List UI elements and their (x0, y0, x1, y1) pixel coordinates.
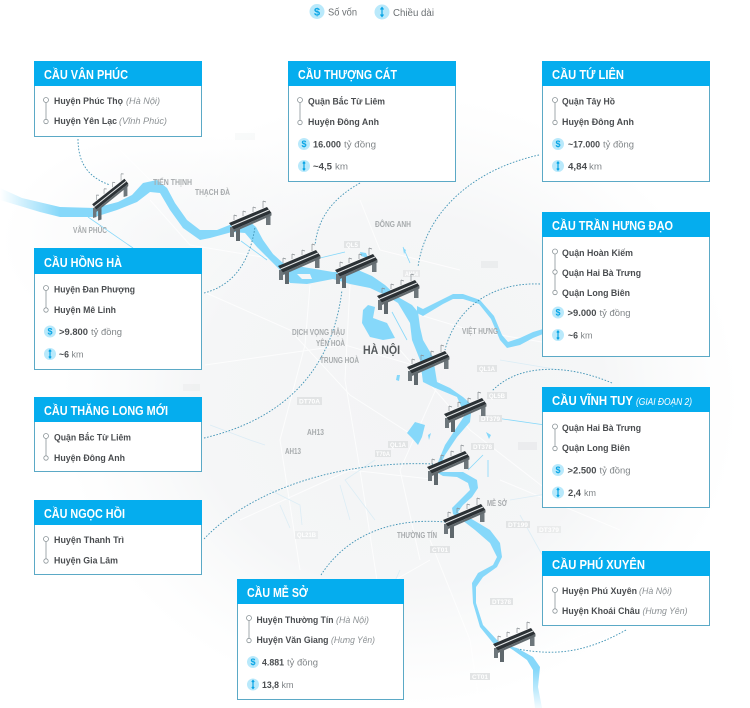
panel: Cầu Mễ Sở: Huyện Văn Giang (256, 635, 329, 646)
panel: Cầu Phú Xuyên: (Hà Nội) (639, 586, 672, 597)
panel: Cầu Mễ Sở: (Hưng Yên) (331, 635, 375, 646)
panel: Cầu Thượng Cát: Quận Bắc Từ Liêm (308, 96, 385, 108)
panel: Cầu Vĩnh Tuy (giai đoạn 2): tỷ đồng (600, 466, 630, 476)
road tags: DT379 (481, 416, 500, 423)
map labels: DỊCH VỌNG HẬU (292, 328, 345, 337)
road tags: DT70A (299, 398, 320, 406)
map labels: AH13 (307, 428, 324, 437)
panel: Cầu Văn Phúc: CẦU VÂN PHÚC (44, 67, 129, 82)
panel: Cầu Tứ Liên: Quận Tây Hồ (562, 96, 615, 108)
road tags: DT199 (508, 522, 528, 529)
road tags: QL5 (346, 242, 358, 249)
panel: Cầu Thượng Cát: $ (301, 139, 307, 149)
panel: Cầu Phú Xuyên: Huyện Khoái Châu (562, 606, 640, 617)
panel: Cầu Mễ Sở: Huyện Thường Tín (256, 615, 334, 626)
panel: Cầu Hồng Hà: tỷ đồng (91, 327, 122, 338)
panel: Cầu Mễ Sở: $ (250, 657, 256, 667)
legend: $ (314, 6, 320, 18)
panel: Cầu Thăng Long Mới: Quận Bắc Từ Liêm (54, 432, 131, 444)
panel: Cầu Mễ Sở: 4.881 (262, 658, 285, 668)
panel: Cầu Văn Phúc: (Hà Nội) (126, 96, 160, 107)
east branch of the river (417, 294, 543, 348)
road tags: AH14 (405, 271, 418, 278)
map labels: ĐÔNG ANH (375, 220, 411, 229)
panel: Cầu Phú Xuyên: Huyện Phú Xuyên (562, 586, 637, 597)
road tags: DT378 (492, 599, 511, 606)
map labels: YÊN HOÀ (316, 339, 345, 348)
panel: Cầu Hồng Hà: $ (47, 327, 53, 337)
panel: Cầu Hồng Hà: ~6 (59, 350, 69, 360)
panel: Cầu Vĩnh Tuy (giai đoạn 2): $ (555, 465, 561, 475)
map labels: VÂN PHÚC (73, 226, 107, 235)
road tags: DT378 (473, 444, 492, 451)
panel: Cầu Hồng Hà: Huyện Mê Linh (54, 305, 116, 316)
road tags (183, 133, 561, 681)
legend: Chiều dài (393, 7, 434, 19)
panel: Cầu Phú Xuyên: CẦU PHÚ XUYÊN (552, 557, 645, 572)
icon: bridge Thượng Cát (278, 244, 320, 284)
map labels: AH13 (285, 447, 301, 456)
panel: Cầu Trần Hưng Đạo: km (580, 330, 593, 342)
road tags: CT01 (432, 547, 448, 554)
panel: Cầu Tứ Liên (542, 61, 710, 182)
road tags: QL21B (297, 532, 316, 539)
panel: Cầu Mễ Sở: 13,8 (262, 680, 279, 691)
icon: bridge Mễ Sở (443, 498, 486, 538)
panel: Cầu Tứ Liên: ~17.000 (568, 140, 600, 150)
map labels: TIẾN THỊNH (153, 177, 192, 187)
road tags: T70A (376, 451, 390, 458)
panel: Cầu Trần Hưng Đạo: >9.000 (568, 308, 596, 319)
panel: Cầu Trần Hưng Đạo: $ (555, 308, 561, 318)
icon: bridge Tứ Liên (377, 274, 420, 314)
panel: Cầu Vĩnh Tuy (giai đoạn 2): >2.500 (568, 466, 596, 476)
panel: Cầu Hồng Hà (34, 248, 202, 370)
map labels: THẠCH ĐÀ (195, 188, 230, 197)
panel: Cầu Tứ Liên: tỷ đồng (603, 140, 634, 150)
panel: Cầu Văn Phúc: (Vĩnh Phúc) (119, 116, 167, 127)
panel: Cầu Văn Phúc: Huyện Phúc Thọ (54, 96, 123, 107)
panel: Cầu Mễ Sở: CẦU MỄ SỞ (247, 585, 309, 600)
legend (310, 4, 434, 20)
West Lake (362, 305, 395, 340)
river: Sông Hồng (0, 180, 545, 708)
panel: Cầu Thượng Cát: 16.000 (313, 140, 341, 150)
icon: bridge Phú Xuyên (493, 622, 536, 662)
panel: Cầu Thượng Cát: ~4,5 (313, 162, 333, 172)
island (297, 274, 312, 279)
panel: Cầu Trần Hưng Đạo (542, 212, 710, 356)
panel: Cầu Tứ Liên: $ (555, 139, 561, 149)
panel: Cầu Vĩnh Tuy (giai đoạn 2): Quận Long Biên (562, 443, 630, 454)
panel: Cầu Tứ Liên: Huyện Đông Anh (562, 117, 634, 128)
panel: Cầu Ngọc Hồi: Huyện Thanh Trì (54, 535, 124, 546)
icon: bridge Ngọc Hồi (427, 445, 470, 485)
map labels: THƯỜNG TÍN (397, 531, 437, 540)
panel: Cầu Ngọc Hồi (34, 500, 202, 574)
panel: Cầu Thăng Long Mới: Huyện Đông Anh (54, 453, 125, 464)
panel: Cầu Trần Hưng Đạo: Quận Hai Bà Trưng (562, 268, 641, 279)
panel: Cầu Mễ Sở: (Hà Nội) (336, 615, 369, 626)
panel: Cầu Trần Hưng Đạo: tỷ đồng (600, 308, 630, 319)
panel: Cầu Phú Xuyên (542, 551, 710, 626)
panel: Cầu Thượng Cát: Huyện Đông Anh (308, 117, 379, 128)
icon: bridge Hồng Hà (229, 201, 272, 241)
icon: bridge Vĩnh Tuy (444, 392, 486, 432)
panel: Cầu Ngọc Hồi: Huyện Gia Lâm (54, 556, 118, 566)
bridges (92, 172, 536, 662)
panel: Cầu Thăng Long Mới (34, 397, 202, 472)
panel: Cầu Hồng Hà: >9.800 (59, 327, 88, 338)
panel: Cầu Vĩnh Tuy (giai đoạn 2): CẦU VĨNH TUY (552, 393, 633, 408)
road tags: QL1A (390, 442, 406, 449)
panel: Cầu Thượng Cát: CẦU THƯỢNG CÁT (298, 67, 397, 82)
road tags: CT01 (472, 674, 488, 681)
panel: Cầu Tứ Liên: CẦU TỨ LIÊN (552, 67, 624, 82)
dotted connectors (78, 139, 626, 652)
map labels: VIỆT HƯNG (462, 327, 498, 336)
panel: Cầu Văn Phúc: Huyện Yên Lạc (54, 116, 117, 127)
small lakes (360, 248, 491, 445)
icon: bridge Trần Hưng Đạo (407, 345, 450, 385)
panel: Cầu Trần Hưng Đạo: ~6 (568, 330, 578, 342)
road tags: QL1A (479, 366, 495, 373)
panel: Cầu Hồng Hà: CẦU HỒNG HÀ (44, 255, 123, 270)
map labels: MỄ SỞ (487, 499, 507, 508)
panel: Cầu Tứ Liên: 4,84 (568, 162, 588, 172)
panel: Cầu Văn Phúc (34, 61, 202, 136)
panel: Cầu Vĩnh Tuy (giai đoạn 2) (542, 387, 710, 508)
icon: bridge Thăng Long Mới (335, 248, 378, 288)
panel: Cầu Ngọc Hồi: CẦU NGỌC HỒI (44, 506, 125, 521)
map labels: TRUNG HOÀ (320, 356, 359, 365)
panel: Cầu Thượng Cát: km (335, 162, 348, 172)
panel: Cầu Mễ Sở (237, 579, 404, 700)
panel: Cầu Tứ Liên: km (589, 162, 602, 172)
panel: Cầu Mễ Sở: km (282, 680, 294, 691)
panel: Cầu Trần Hưng Đạo: Quận Long Biên (562, 288, 630, 299)
panel: Cầu Thượng Cát (288, 61, 456, 182)
panel: Cầu Trần Hưng Đạo: Quận Hoàn Kiếm (562, 248, 633, 259)
panel: Cầu Thăng Long Mới: CẦU THĂNG LONG MỚI (44, 403, 168, 418)
panel: Cầu Hồng Hà: Huyện Đan Phượng (54, 284, 135, 296)
icon: bridge Vân Phúc (92, 172, 128, 222)
panel: Cầu Hồng Hà: km (72, 350, 84, 360)
panel: Cầu Vĩnh Tuy (giai đoạn 2): (GIAI ĐOẠN 2) (636, 396, 692, 408)
panel: Cầu Vĩnh Tuy (giai đoạn 2): Quận Hai Bà Trưng (562, 423, 641, 434)
panel: Cầu Trần Hưng Đạo: CẦU TRẦN HƯNG ĐẠO (552, 218, 673, 233)
legend: Số vốn (328, 6, 357, 18)
panel: Cầu Mễ Sở: tỷ đồng (287, 658, 318, 668)
panel: Cầu Vĩnh Tuy (giai đoạn 2): km (584, 488, 596, 499)
road tags: DT379 (539, 527, 559, 534)
panel: Cầu Vĩnh Tuy (giai đoạn 2): 2,4 (568, 488, 582, 499)
panel: Cầu Thượng Cát: tỷ đồng (344, 140, 376, 150)
panel: Cầu Phú Xuyên: (Hưng Yên) (642, 606, 688, 617)
map labels (73, 177, 507, 540)
map labels: HÀ NỘI (363, 344, 400, 357)
road tags: QL5B (489, 393, 505, 400)
